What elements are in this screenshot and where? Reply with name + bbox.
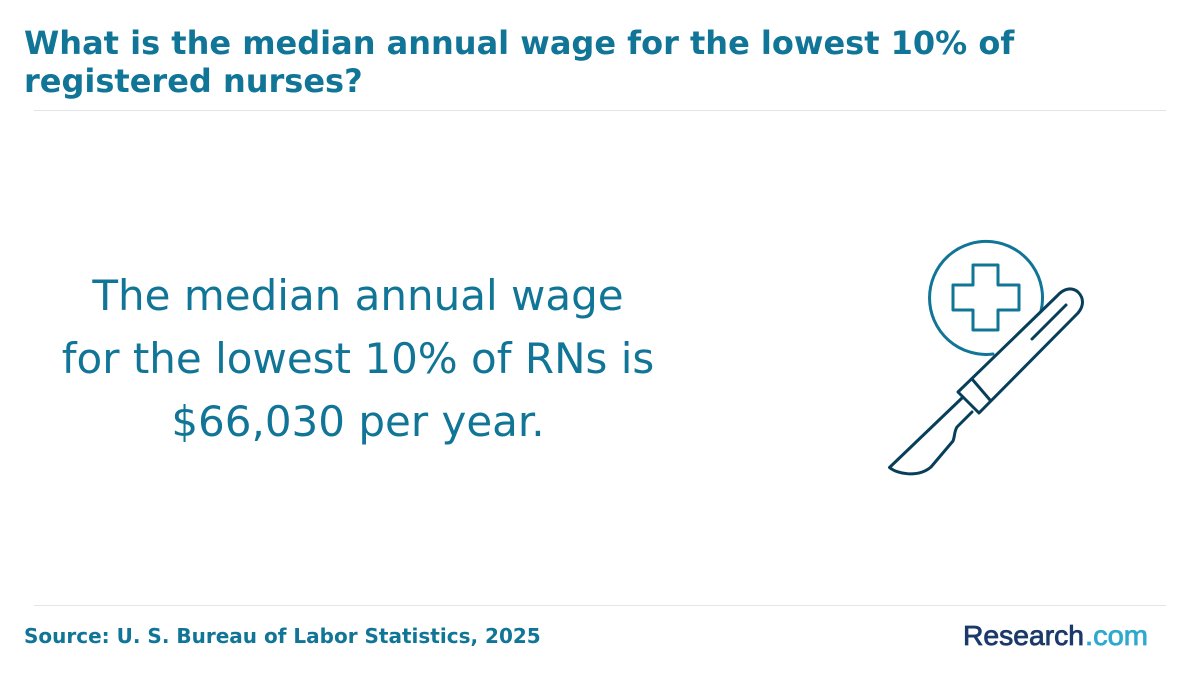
statement text: $66,030 per year. bbox=[171, 397, 545, 446]
statement text: The median annual wage bbox=[92, 271, 624, 320]
title bbox=[24, 24, 1015, 100]
statement text: for the lowest 10% of RNs is bbox=[62, 334, 654, 383]
title: registered nurses? bbox=[24, 62, 363, 100]
logo bbox=[963, 620, 1148, 651]
source note: Source: U. S. Bureau of Labor Statistics, 2025 bbox=[24, 624, 541, 648]
title: What is the median annual wage for the lowest 10% of bbox=[24, 24, 1014, 62]
logo: .com bbox=[1085, 620, 1148, 651]
logo: Research bbox=[963, 620, 1084, 651]
statement text bbox=[62, 271, 654, 446]
icon: scalpel bbox=[890, 289, 1082, 474]
icon: circle with cross bbox=[930, 241, 1043, 354]
icon: scalpel with medical cross bbox=[888, 240, 1084, 476]
